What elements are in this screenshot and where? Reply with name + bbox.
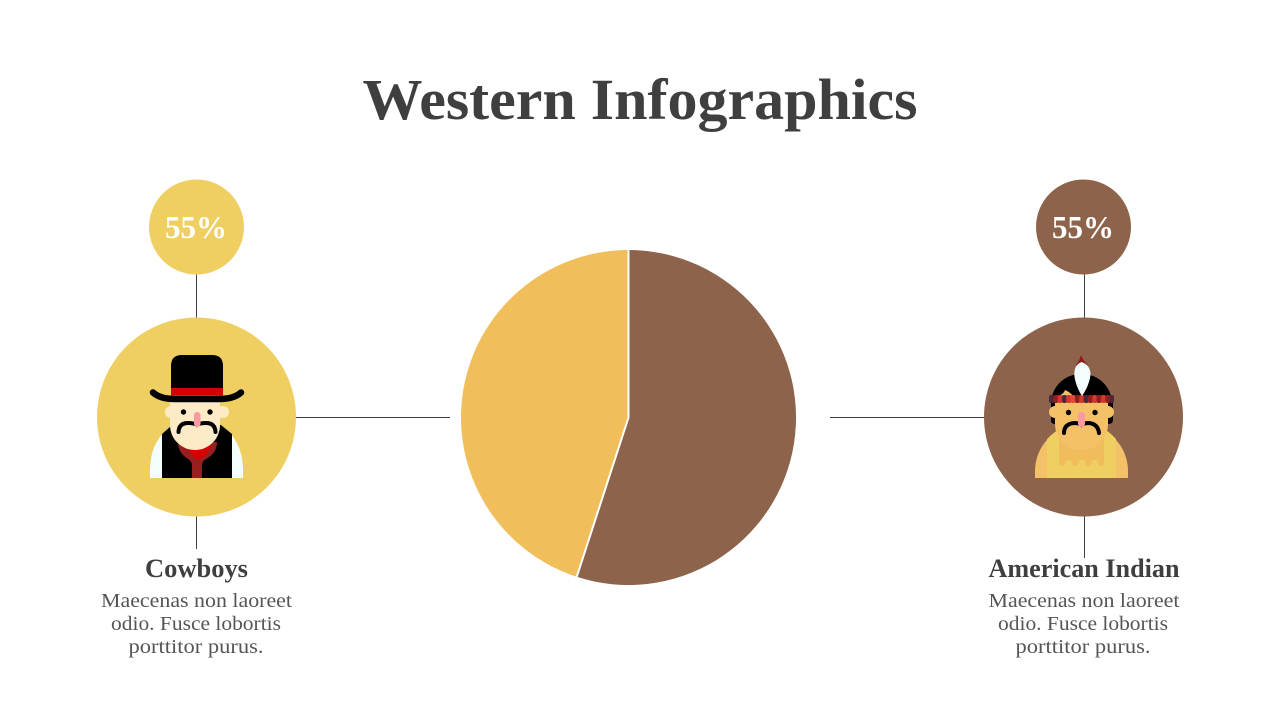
headband <box>1049 395 1114 403</box>
title: Western Infographics <box>362 67 918 132</box>
icon: cowboy <box>150 355 243 478</box>
connector lines <box>196 274 1084 558</box>
icon: american indian <box>1035 355 1128 478</box>
panel: american indian icon circle <box>984 318 1183 516</box>
text block: american indian description: odio. Fusce lobortis <box>998 613 1168 635</box>
text block: american indian description <box>988 590 1180 658</box>
text block: cowboys description: odio. Fusce lobortis <box>111 613 281 635</box>
text block: cowboys description <box>101 590 292 658</box>
text block: american indian description: porttitor purus. <box>1016 636 1150 658</box>
heading: Cowboys: Cowboys <box>145 554 248 583</box>
right percentage badge <box>1036 180 1131 274</box>
text block: american indian description: Maecenas non laoreet <box>988 590 1180 612</box>
pie chart <box>461 250 796 585</box>
heading: American Indian: American Indian <box>988 554 1180 583</box>
right percentage badge: 55% <box>1052 209 1114 245</box>
text block: cowboys description: Maecenas non laoreet <box>101 590 292 612</box>
panel: cowboy icon circle <box>97 318 296 516</box>
text block: cowboys description: porttitor purus. <box>128 636 264 658</box>
left percentage badge: 55% <box>165 209 227 245</box>
left percentage badge <box>149 180 244 274</box>
